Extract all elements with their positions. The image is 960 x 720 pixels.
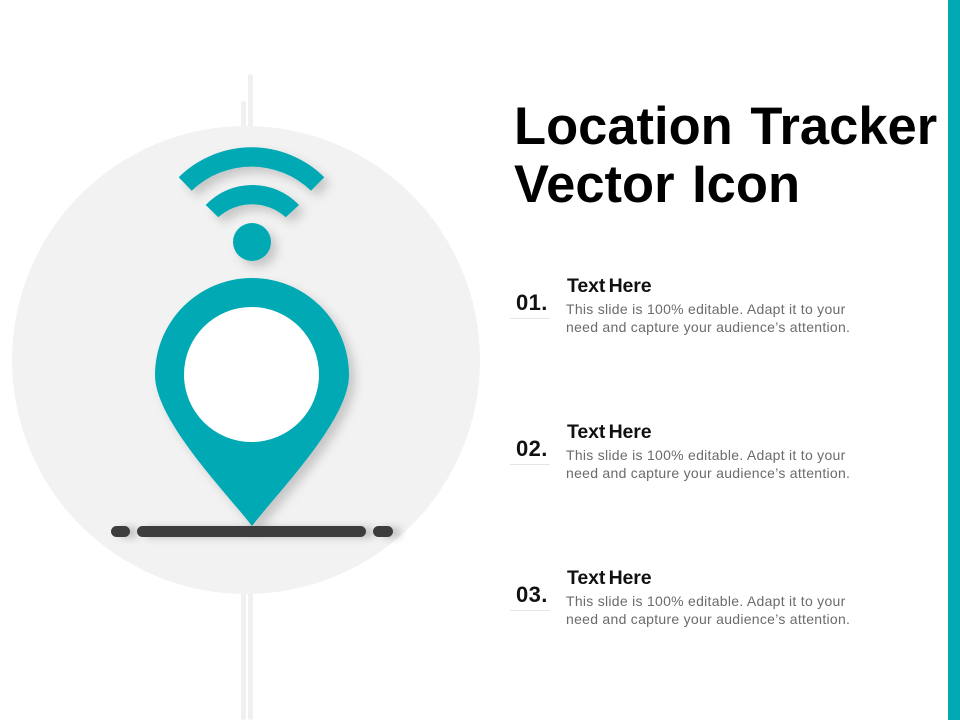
item 01: This slide is 100% editable. Adapt it to your bbox=[566, 301, 846, 317]
item 02: 02. bbox=[516, 436, 548, 461]
vertical line: long bbox=[248, 74, 253, 720]
item 02: This slide is 100% editable. Adapt it to your bbox=[566, 447, 846, 463]
ground line bbox=[111, 526, 393, 537]
item 01 bbox=[510, 275, 850, 335]
item 03: 03. bbox=[516, 582, 548, 607]
title: Location Tracker bbox=[514, 97, 937, 156]
item 03: This slide is 100% editable. Adapt it to your bbox=[566, 593, 846, 609]
vertical line: short bbox=[241, 101, 246, 720]
illustration: location tracker icon bbox=[12, 74, 480, 720]
icon: wifi inner arc bbox=[206, 185, 299, 217]
right accent bar bbox=[948, 0, 960, 720]
item 03: Text Here bbox=[567, 567, 652, 589]
item 01: need and capture your audience’s attention. bbox=[566, 319, 850, 335]
icon: pin inner circle bbox=[184, 307, 319, 442]
item 02: need and capture your audience’s attention. bbox=[566, 465, 850, 481]
item 03 bbox=[510, 567, 850, 627]
item 01: 01. bbox=[516, 290, 548, 315]
background circle bbox=[12, 126, 480, 594]
icon: wifi outer arc bbox=[179, 147, 324, 191]
item 02: Text Here bbox=[567, 421, 652, 443]
item 02 bbox=[510, 421, 850, 481]
title bbox=[514, 97, 937, 214]
title: Vector Icon bbox=[514, 155, 800, 214]
item 03: need and capture your audience’s attention. bbox=[566, 611, 850, 627]
icon: wifi dot bbox=[233, 223, 271, 261]
item 01: Text Here bbox=[567, 275, 652, 297]
icon: map pin bbox=[155, 278, 349, 526]
